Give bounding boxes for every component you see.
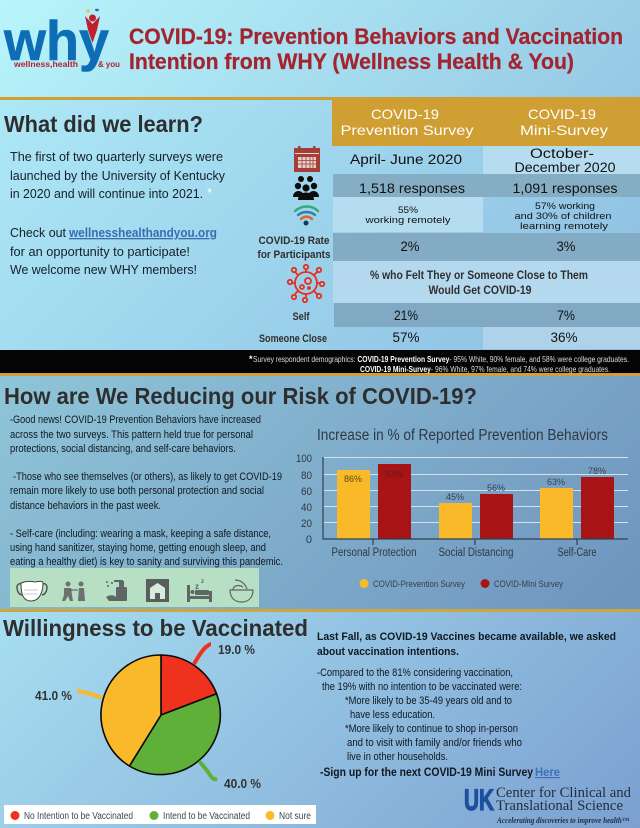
bar value labels: 86% <box>344 474 362 484</box>
icon: home <box>146 579 169 602</box>
title: Intention from WHY (Wellness Health & You) <box>129 49 574 74</box>
intro text block: Check out <box>10 225 66 240</box>
logo: UK Center for Clinical and Translational Science: Center for Clinical and <box>496 785 632 801</box>
y-axis labels: 20 <box>301 518 312 530</box>
pie leader lines <box>77 644 217 779</box>
category labels: Social Distancing <box>438 547 514 559</box>
icon: wifi <box>295 206 318 226</box>
icon: bed and sleep: z <box>195 582 199 591</box>
pie legend: Not sure <box>279 811 311 822</box>
intro text block: The first of two quarterly surveys were <box>10 149 223 164</box>
icon: calendar <box>294 146 320 172</box>
intro text block: for an opportunity to participate! <box>10 244 190 259</box>
intro text block: in 2020 and will continue into 2021. <box>10 186 203 201</box>
y-axis labels: 80 <box>301 470 312 482</box>
table row values: 3% <box>556 239 576 254</box>
vaccination intention text block: have less education. <box>350 709 435 721</box>
icon: group of people <box>293 176 319 200</box>
icon: mask <box>17 581 47 601</box>
bar value labels: 45% <box>446 492 464 502</box>
category labels <box>332 547 596 559</box>
logo: WHY wellness, health and you: & you <box>98 60 120 69</box>
intro text block: We welcome new WHY members! <box>10 262 197 277</box>
table row values: and 30% of children <box>514 211 612 222</box>
pie value labels: 19.0 % <box>218 643 255 657</box>
table row values: learning remotely <box>520 221 608 232</box>
category labels: Self-Care <box>558 547 596 559</box>
intro text block: wellnesshealthandyou.org <box>68 225 217 240</box>
prevention text block: -Those who see themselves (or others), as likely to get COVID-19 <box>13 471 282 483</box>
y-axis labels: 100 <box>296 453 312 465</box>
vaccination intention text block: about vaccination intentions. <box>317 646 459 658</box>
prevention text block: across the two surveys. This pattern held true for personal <box>10 429 253 441</box>
pie legend: Intend to be Vaccinated <box>163 811 250 822</box>
prevention text block: protections, social distancing, and self-care behaviors. <box>10 443 236 455</box>
table row values: 2% <box>400 239 420 254</box>
intro text block: launched by the University of Kentucky <box>10 168 225 183</box>
chart gridlines <box>323 458 628 522</box>
intro text block: * <box>207 185 212 200</box>
icon: salad bowl <box>230 580 253 602</box>
table row labels: Self <box>292 311 310 323</box>
table spanning row heading: % who Felt They or Someone Close to Them <box>370 270 588 282</box>
logo: WHY wellness, health and you: why <box>3 9 109 72</box>
heading: how are we reducing our risk: How are We Reducing our Risk of COVID-19? <box>4 383 477 409</box>
pie legend: No Intention to be Vaccinated <box>24 811 133 822</box>
y-axis labels <box>296 453 312 546</box>
table row values: 1,518 responses <box>359 181 465 196</box>
bar value labels: 78% <box>588 466 606 476</box>
chart axes <box>323 457 628 545</box>
table row labels: COVID-19 Rate <box>258 235 330 247</box>
prevention text block: using hand sanitizer, staying home, getting enough sleep, and <box>10 542 266 554</box>
table header: mini survey <box>520 106 608 138</box>
y-axis labels: 40 <box>301 502 312 514</box>
icon: bed and sleep: z <box>201 579 204 585</box>
icon: hand sanitizer <box>106 580 127 601</box>
table spanning row heading <box>370 270 588 297</box>
prevention text block: - Self-care (including: wearing a mask, keeping a safe distance, <box>10 528 271 540</box>
table header: mini survey: COVID-19 <box>528 106 596 122</box>
heading: willingness to be vaccinated: Willingness to be Vaccinated <box>3 615 308 641</box>
survey comparison table <box>258 100 640 349</box>
table row values: working remotely <box>364 215 451 226</box>
prevention text block: remain more likely to use both personal protection and social <box>10 485 264 497</box>
icon: bed and sleep <box>187 579 212 602</box>
pie value labels: 40.0 % <box>224 777 261 791</box>
vaccination intention text block: -Compared to the 81% considering vaccination, <box>317 667 513 679</box>
chart legend: COVID-Prevention Survey <box>373 579 465 590</box>
table row values: 36% <box>550 330 578 345</box>
intro text block <box>10 149 225 277</box>
table row values: 55% <box>398 205 419 216</box>
category labels: Personal Protection <box>332 547 416 559</box>
table row values: December 2020 <box>514 160 616 175</box>
logo: WHY wellness, health and you: wellness,health <box>13 60 78 69</box>
table header: mini survey: Mini-Survey <box>520 122 608 138</box>
chart legend: COVID-MIni Survey <box>494 579 563 590</box>
vaccination intention text block: live in other households. <box>347 751 448 763</box>
table row values: 1,091 responses <box>512 181 618 196</box>
demographics footnote bar: * <box>249 354 253 364</box>
vaccination intention text block: -Sign up for the next COVID-19 Mini Survey <box>320 767 534 779</box>
vaccination intention text block: Here <box>535 767 560 779</box>
bar value labels: 56% <box>487 483 505 493</box>
table header: prevention survey: COVID-19 <box>371 106 439 122</box>
vaccination intention text block <box>317 631 616 779</box>
table row labels: for Participants <box>258 249 330 261</box>
table header: prevention survey <box>340 106 474 138</box>
chart legend <box>360 579 563 590</box>
table row labels <box>258 235 330 345</box>
table row values <box>350 146 618 345</box>
table row labels: Someone Close <box>259 333 327 345</box>
icon: social distance <box>62 582 85 601</box>
pie value labels: 41.0 % <box>35 689 72 703</box>
bar value labels: 63% <box>547 477 565 487</box>
heading: what did we learn: What did we learn? <box>4 111 203 137</box>
self-care icon strip <box>10 568 259 607</box>
prevention text block: eating a healthy diet) is key to sanity and surviving this pandemic. <box>10 556 283 568</box>
pie legend <box>4 805 316 824</box>
table row values: 21% <box>394 308 418 323</box>
prevention text block: -Good news! COVID-19 Prevention Behaviors have increased <box>10 414 261 426</box>
bar chart: prevention behaviors <box>296 427 628 590</box>
pie slices <box>101 655 220 775</box>
table row values: April- June 2020 <box>350 152 462 167</box>
title: COVID-19: Prevention Behaviors and Vaccination <box>129 24 623 49</box>
pie value labels <box>35 643 261 791</box>
table row values: 7% <box>557 308 575 323</box>
y-axis labels: 60 <box>301 486 312 498</box>
prevention text block: distance behaviors in the past week. <box>10 500 161 512</box>
pie chart: vaccination intention <box>35 643 261 791</box>
vaccination intention text block: *More likely to continue to shop in-person <box>345 723 518 735</box>
vaccination intention text block: Last Fall, as COVID-19 Vaccines became available, we asked <box>317 631 616 643</box>
chart title: Increase in % of Reported Prevention Behaviors <box>317 427 608 444</box>
y-axis labels: 0 <box>306 534 312 546</box>
logo: UK Center for Clinical and Translational Science: Translational Science <box>496 798 623 814</box>
bar value labels <box>344 466 606 502</box>
table row values: 57% working <box>535 201 595 212</box>
demographics footnote bar <box>0 350 640 376</box>
icon: virus <box>288 265 324 302</box>
chart bars <box>337 464 614 539</box>
vaccination intention text block: the 19% with no intention to be vaccinated were: <box>322 681 522 693</box>
table spanning row heading: Would Get COVID-19 <box>428 285 532 297</box>
table row values: October- <box>530 146 594 161</box>
logo: UK Center for Clinical and Translational Science: UK <box>464 784 494 817</box>
title <box>129 24 623 74</box>
table row values: 57% <box>392 330 420 345</box>
prevention text block <box>10 414 283 568</box>
vaccination intention text block: and to visit with family and/or friends who <box>347 737 522 749</box>
vaccination intention text block: *More likely to be 35-49 years old and to <box>345 695 512 707</box>
bar value labels: 93% <box>385 469 403 479</box>
table header: prevention survey: Prevention Survey <box>340 122 474 138</box>
logo: UK Center for Clinical and Translational Science <box>464 784 632 825</box>
